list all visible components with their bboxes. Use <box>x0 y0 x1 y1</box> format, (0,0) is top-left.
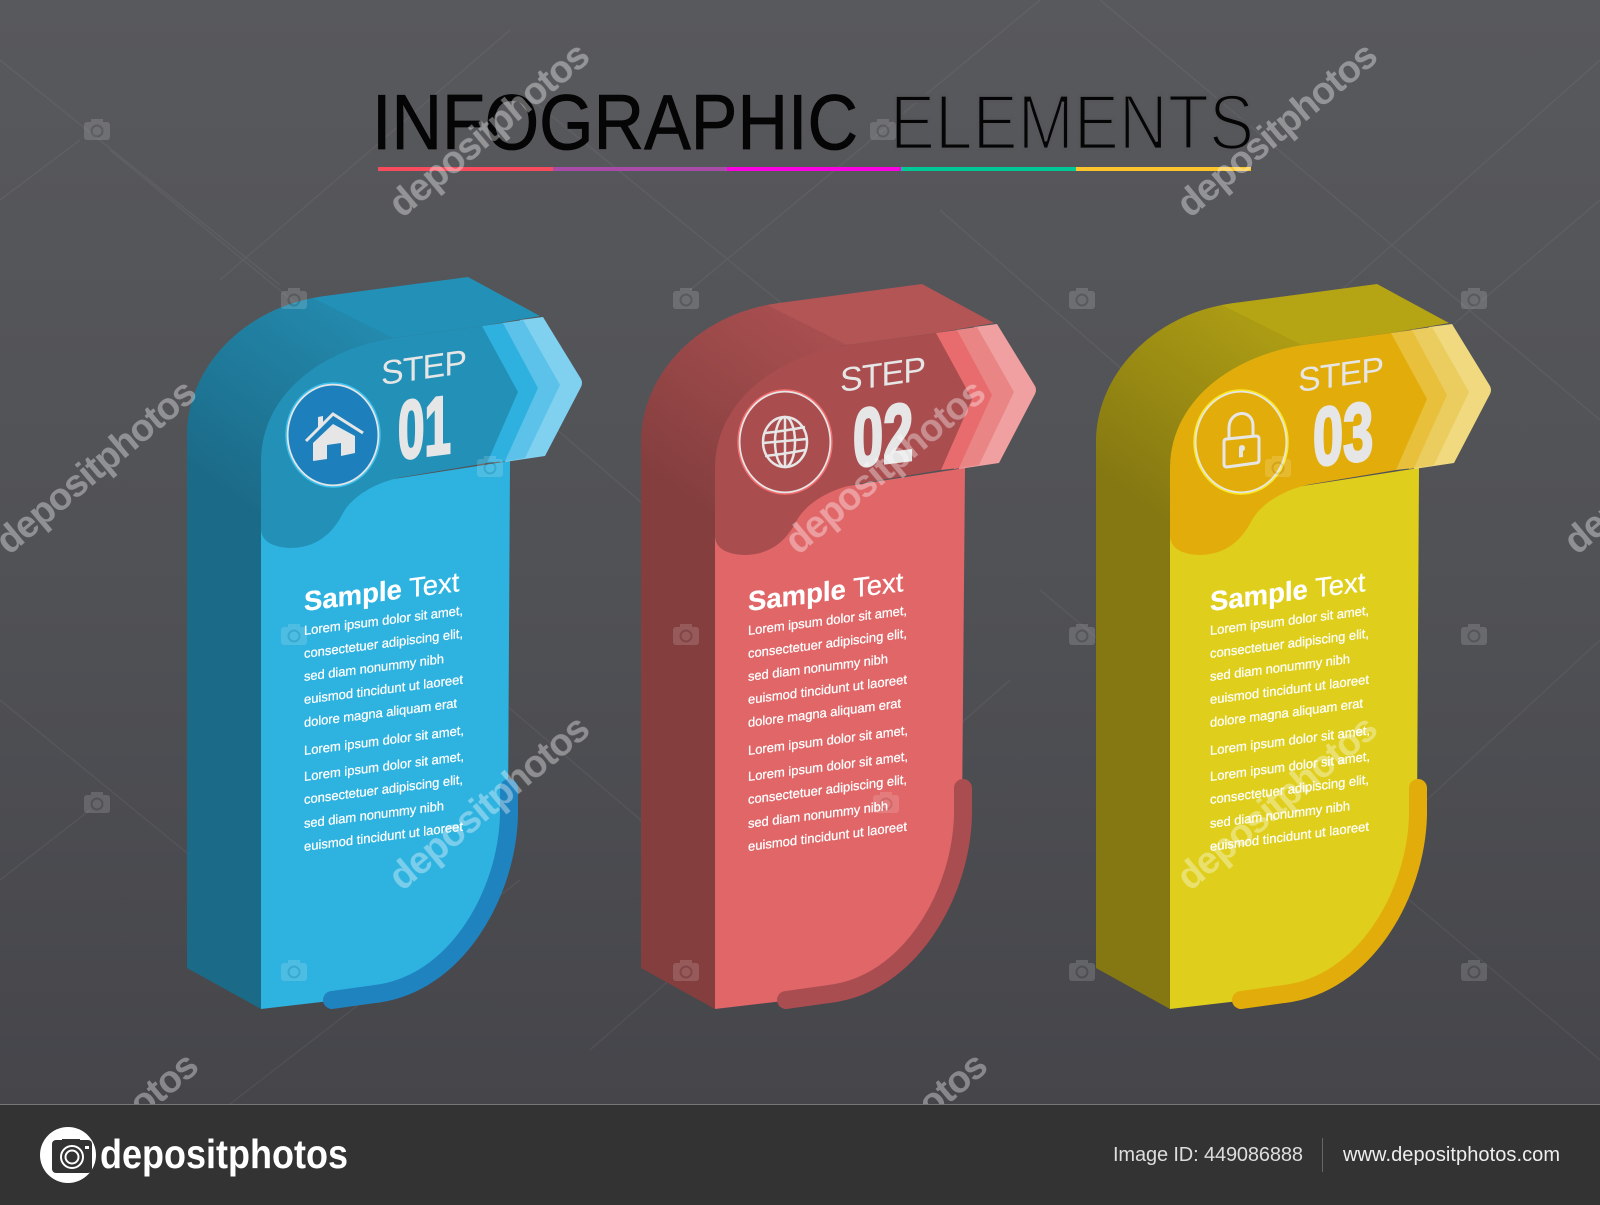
footer bar <box>0 1104 1600 1205</box>
body copy: dolore magna aliquam erat <box>748 695 901 730</box>
body copy: sed diam nonummy nibh <box>304 798 444 831</box>
text block <box>748 566 908 854</box>
step number: 01 <box>398 379 451 477</box>
text block <box>304 566 464 854</box>
body copy: sed diam nonummy nibh <box>748 651 888 684</box>
panel: step 03 <box>1096 284 1491 1009</box>
body copy: Lorem ipsum dolor sit amet, <box>304 749 464 784</box>
body copy: consectetuer adipiscing elit, <box>748 772 907 807</box>
watermark text: depositphotos <box>1169 34 1386 226</box>
shape: card 02 body <box>641 284 1036 1009</box>
body copy: consectetuer adipiscing elit, <box>304 626 463 661</box>
body copy: Lorem ipsum dolor sit amet, <box>1210 723 1370 758</box>
watermark text: depositphotos <box>777 371 994 563</box>
watermark text: depositphotos <box>1169 707 1386 899</box>
panel: step 02 <box>641 284 1036 1009</box>
subheading: Sample Text <box>304 566 460 617</box>
body copy: consectetuer adipiscing elit, <box>748 626 907 661</box>
body copy: Lorem ipsum dolor sit amet, <box>748 603 907 638</box>
body copy: euismod tincidunt ut laoreet <box>304 819 463 854</box>
body copy: sed diam nonummy nibh <box>1210 798 1350 831</box>
step label: STEP <box>1298 350 1384 400</box>
subheading: Sample Text <box>1210 566 1366 617</box>
body copy <box>1210 603 1370 854</box>
body copy: sed diam nonummy nibh <box>1210 651 1350 684</box>
body copy: Lorem ipsum dolor sit amet, <box>748 749 908 784</box>
body copy: euismod tincidunt ut laoreet <box>1210 819 1369 854</box>
watermark text: depositphotos <box>381 34 598 226</box>
body copy: euismod tincidunt ut laoreet <box>748 819 907 854</box>
body copy: consectetuer adipiscing elit, <box>1210 772 1369 807</box>
body copy: euismod tincidunt ut laoreet <box>1210 672 1369 707</box>
footer logo icon <box>40 1127 96 1183</box>
body copy: euismod tincidunt ut laoreet <box>748 672 907 707</box>
body copy: sed diam nonummy nibh <box>304 651 444 684</box>
body copy: consectetuer adipiscing elit, <box>1210 626 1369 661</box>
website url: www.depositphotos.com <box>1342 1144 1560 1166</box>
body copy: Lorem ipsum dolor sit amet, <box>1210 603 1369 638</box>
icon: globe badge <box>738 390 832 494</box>
subheading: Sample Text <box>748 566 904 617</box>
body copy: Lorem ipsum dolor sit amet, <box>748 723 908 758</box>
watermark camera icons <box>84 119 1487 981</box>
body copy: euismod tincidunt ut laoreet <box>304 672 463 707</box>
shape: card 03 body <box>1096 284 1491 1009</box>
body copy <box>304 603 464 854</box>
body copy: Lorem ipsum dolor sit amet, <box>304 603 463 638</box>
body copy: consectetuer adipiscing elit, <box>304 772 463 807</box>
body copy: dolore magna aliquam erat <box>1210 695 1363 730</box>
title word: elements: ELEMENTS <box>890 78 1254 166</box>
step label: STEP <box>840 350 926 400</box>
body copy: Lorem ipsum dolor sit amet, <box>304 723 464 758</box>
title <box>372 78 1254 166</box>
rainbow underline <box>378 167 1251 171</box>
body copy: sed diam nonummy nibh <box>748 798 888 831</box>
step number: 03 <box>1313 384 1373 484</box>
icon: padlock badge <box>1194 390 1288 494</box>
step number: 02 <box>853 385 913 485</box>
text block <box>1210 566 1370 854</box>
shape: card 01 body <box>187 277 582 1009</box>
body copy: Lorem ipsum dolor sit amet, <box>1210 749 1370 784</box>
icon: house badge <box>286 383 380 487</box>
step label: STEP <box>381 343 467 393</box>
body copy <box>748 603 908 854</box>
panel: step 01 <box>187 277 582 1009</box>
body copy: dolore magna aliquam erat <box>304 695 457 730</box>
title word: infographic: INFOGRAPHIC <box>372 78 858 166</box>
footer logo wordmark: depositphotos <box>100 1131 348 1177</box>
image id: Image ID: 449086888 <box>1113 1144 1303 1166</box>
watermark text: depositphotos <box>381 707 598 899</box>
